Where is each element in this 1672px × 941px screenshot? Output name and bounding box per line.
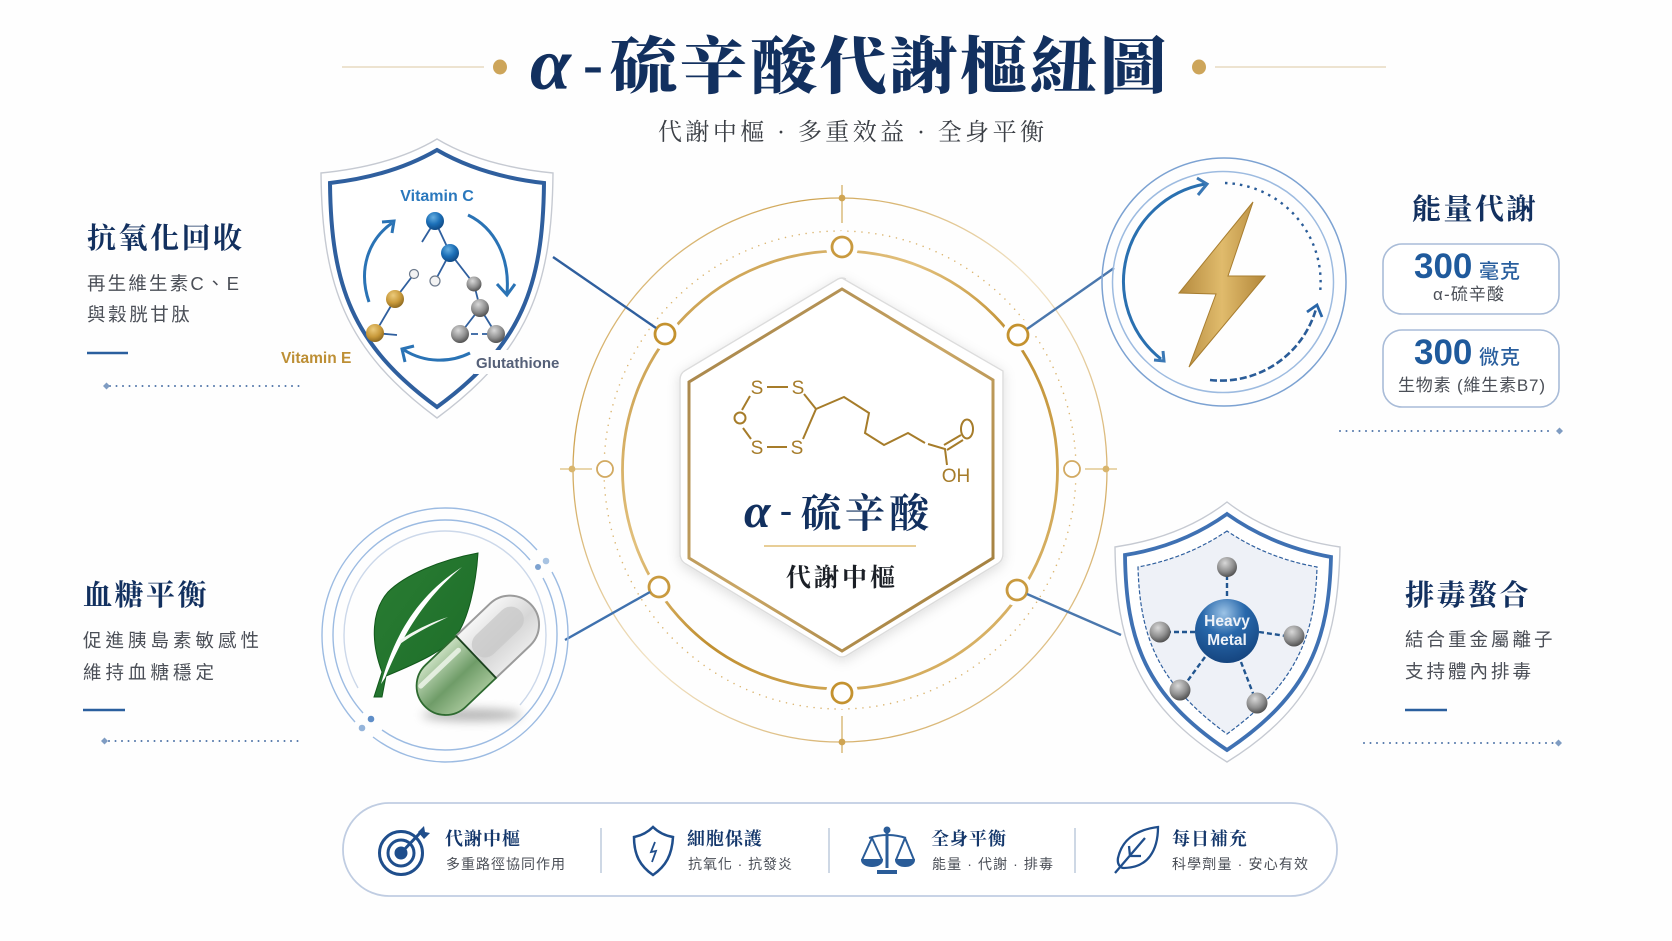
icon: energy bolt rings — [1102, 158, 1346, 406]
molecule: alpha lipoic acid structure: S — [791, 438, 803, 459]
text: metabolic hub: 代謝中樞 — [445, 829, 521, 849]
dosage box: alpha lipoic acid: 300 — [1414, 247, 1472, 286]
central name: 硫辛酸 — [801, 491, 931, 536]
node: lower left — [643, 571, 675, 603]
text: daily supplement: 每日補充 — [1172, 828, 1248, 849]
panel: antioxidant recycling text: 抗氧化回收 — [87, 222, 245, 255]
text: cell protection: 細胞保護 — [687, 828, 763, 849]
panel: energy metabolism text: 能量代謝 — [1412, 193, 1538, 226]
icon: target — [380, 826, 430, 874]
text: metabolic hub — [445, 829, 565, 872]
dosage box: alpha lipoic acid — [1383, 244, 1559, 314]
central name: α — [744, 485, 772, 538]
central subtitle: 代謝中樞 — [786, 564, 898, 592]
title: α — [530, 24, 572, 106]
dosage box: alpha lipoic acid: 毫克 — [1479, 260, 1521, 283]
marker: top — [839, 185, 845, 223]
connector lines — [553, 257, 1121, 640]
text: whole-body balance: 能量 · 代謝 · 排毒 — [932, 856, 1053, 872]
dosage box: alpha lipoic acid: α-硫辛酸 — [1433, 285, 1504, 304]
central hexagon — [680, 278, 1003, 657]
text: daily supplement: 科學劑量 · 安心有效 — [1172, 856, 1308, 872]
text: whole-body balance: 全身平衡 — [931, 829, 1007, 849]
node: upper right — [1002, 319, 1034, 351]
molecule: alpha lipoic acid structure: S — [792, 378, 804, 399]
marker: left — [560, 466, 592, 472]
panel: blood sugar text: 促進胰島素敏感性 — [83, 630, 263, 651]
label: Vitamin E: Vitamin E — [281, 350, 351, 367]
icon: leaf — [1115, 827, 1158, 873]
icon: shield — [634, 827, 673, 875]
arrows: recycling loop — [365, 215, 515, 362]
panel: blood sugar text: 血糖平衡 — [83, 579, 209, 612]
molecule: alpha lipoic acid structure: S — [751, 378, 763, 399]
text: whole-body balance — [931, 829, 1053, 872]
label: Glutathione — [474, 350, 560, 374]
node: left — [594, 458, 616, 480]
central name: - — [780, 490, 792, 530]
marker: right — [1085, 466, 1117, 472]
title — [342, 24, 1386, 106]
node: top — [826, 231, 858, 263]
molecule: alpha lipoic acid structure: S — [751, 438, 763, 459]
node: bottom — [826, 677, 858, 709]
node: lower right — [1001, 574, 1033, 606]
dosage box: biotin: 生物素 (維生素B7) — [1398, 376, 1545, 395]
panel: detox text: 排毒螯合 — [1405, 579, 1531, 612]
title: 硫辛酸代謝樞紐圖 — [610, 33, 1167, 101]
dosage box: biotin: 300 — [1414, 333, 1472, 372]
panel: detox text: 結合重金屬離子 — [1405, 629, 1556, 650]
label: Glutathione: Glutathione — [476, 355, 559, 372]
label: Vitamin C: Vitamin C — [400, 188, 474, 205]
text: metabolic hub: 多重路徑協同作用 — [446, 856, 565, 872]
text: cell protection: 抗氧化 · 抗發炎 — [688, 856, 792, 872]
title: - — [583, 31, 603, 97]
panel: blood sugar text — [83, 579, 303, 744]
icon: lightning bolt — [1179, 202, 1265, 367]
subtitle: 代謝中樞 · 多重效益 · 全身平衡 — [658, 119, 1044, 146]
icon: leaf and capsule — [322, 508, 568, 762]
molecule — [366, 212, 505, 343]
dosage box: biotin: 微克 — [1479, 346, 1521, 369]
central rings — [560, 185, 1117, 753]
panel: detox text — [1364, 579, 1562, 746]
panel: antioxidant recycling text: 再生維生素C、E — [87, 273, 239, 294]
panel: blood sugar text: 維持血糖穩定 — [83, 662, 218, 683]
molecule: alpha lipoic acid structure — [734, 378, 973, 487]
panel: bottom summary bar — [343, 803, 1337, 896]
icon: scales — [862, 828, 914, 872]
text: daily supplement — [1172, 828, 1308, 872]
text: cell protection — [687, 828, 792, 872]
panel: antioxidant recycling text — [87, 222, 303, 390]
capsule — [405, 584, 551, 727]
molecule: alpha lipoic acid structure: OH — [942, 466, 970, 487]
marker: bottom — [839, 716, 845, 753]
icon: antioxidant shield — [278, 139, 560, 418]
panel: energy metabolism text — [1340, 193, 1563, 434]
icon: heavy metal shield — [1115, 502, 1340, 762]
molecule: chelation — [1150, 557, 1304, 714]
molecule: chelation: Heavy — [1204, 613, 1250, 630]
panel: antioxidant recycling text: 與穀胱甘肽 — [87, 304, 193, 325]
dosage box: biotin — [1383, 330, 1559, 407]
node: upper left — [649, 318, 681, 350]
panel: detox text: 支持體內排毒 — [1405, 661, 1534, 682]
molecule: chelation: Metal — [1207, 632, 1247, 649]
leaf — [374, 553, 478, 697]
node: right — [1061, 458, 1083, 480]
